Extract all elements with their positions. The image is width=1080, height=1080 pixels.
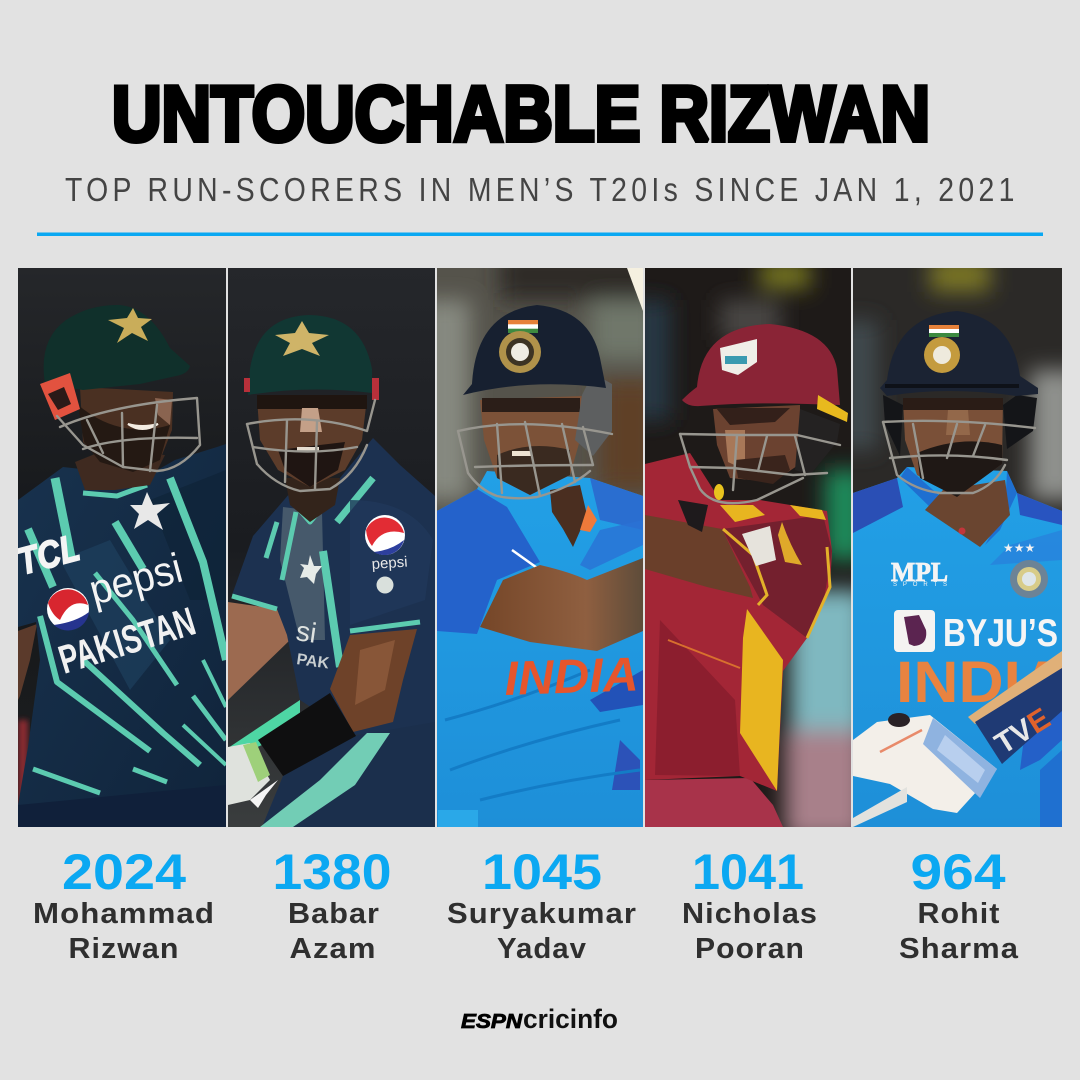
- title: UNTOUCHABLE RIZWAN: [112, 70, 930, 158]
- face: [903, 398, 1003, 497]
- neck: [550, 485, 587, 547]
- flag badge: [929, 325, 959, 337]
- jersey: [437, 471, 643, 827]
- grille: [57, 398, 200, 471]
- batting glove: [228, 742, 278, 808]
- bat: [968, 651, 1062, 764]
- badge: star: [108, 308, 152, 343]
- subtitle: TOP RUN-SCORERS IN MEN’S T20Is SINCE JAN 1, 2021: [65, 171, 1014, 209]
- stat: Suryakumar Yadav: Yadav: [497, 933, 587, 965]
- dark sleeve left: [678, 500, 708, 532]
- jersey text: INDIA: INDIA: [896, 650, 1066, 715]
- badge: star: [275, 321, 329, 356]
- grille: [458, 422, 612, 498]
- arm: [18, 624, 37, 700]
- bat edge: [627, 268, 643, 311]
- grille: [680, 434, 840, 503]
- stat: Mohammad Rizwan: 2024: [62, 844, 186, 900]
- wristband: [258, 693, 356, 776]
- logo: pepsi globe: [365, 515, 405, 555]
- logo: pepsi globe: [47, 588, 89, 630]
- stat: Nicholas Pooran: 1041: [692, 844, 804, 900]
- arm: [645, 515, 753, 598]
- jersey text: PAK partial: PAK: [295, 651, 331, 673]
- sleeve badge: [376, 576, 394, 594]
- jersey star: [300, 555, 322, 584]
- yellow clip: [817, 395, 848, 422]
- sponsor: MPL: MPL: [891, 557, 948, 587]
- neck: [75, 454, 165, 490]
- sleeve wing: [778, 522, 802, 565]
- jersey: [18, 444, 226, 827]
- neck: [925, 480, 1010, 547]
- stat: Nicholas Pooran: Pooran: [695, 933, 805, 965]
- West Indies crest: [720, 339, 757, 375]
- sponsor: BYJU'S: BYJU’S: [943, 612, 1058, 655]
- panel: Suryakumar Yadav photo: [437, 268, 643, 827]
- flag badge: [508, 320, 538, 333]
- helmet: [682, 324, 848, 422]
- neck: [285, 478, 340, 522]
- grille: [247, 400, 375, 491]
- logo: ESPNcricinfo: [461, 1004, 618, 1034]
- sponsor: BYJU'S: [894, 610, 1058, 655]
- jersey: [645, 453, 832, 791]
- stat: Suryakumar Yadav: 1045: [482, 844, 602, 900]
- stat: Mohammad Rizwan: Mohammad: [33, 898, 215, 930]
- stat: Babar Azam: 1380: [272, 844, 392, 900]
- helmet visor side: [575, 373, 612, 456]
- forearm: [330, 629, 417, 732]
- left arm: [228, 602, 290, 700]
- button: [958, 528, 966, 534]
- logo: ESPNcricinfo: cricinfo: [523, 1004, 618, 1034]
- yellow side panel: [740, 609, 783, 791]
- face: [713, 405, 800, 484]
- helmet: [44, 305, 190, 390]
- helmet: [244, 315, 379, 400]
- stat: Mohammad Rizwan: [33, 844, 215, 965]
- stat: Suryakumar Yadav: [447, 844, 637, 965]
- stat: Babar Azam: Azam: [290, 933, 376, 965]
- arm: [480, 558, 643, 651]
- stat: Rohit Sharma: Rohit: [918, 898, 1000, 930]
- jersey text: INDIA: INDIA: [504, 648, 639, 706]
- shorts: [645, 778, 783, 827]
- face: [257, 395, 367, 487]
- BCCI crest: [1010, 560, 1048, 598]
- panel: Babar Azam photo: [228, 268, 435, 827]
- sponsor: TCL: TCL: [13, 527, 84, 584]
- stat: Nicholas Pooran: [682, 844, 818, 965]
- helmet visor side: [795, 409, 840, 475]
- blurred background: [630, 262, 865, 840]
- stat: Babar Azam: [272, 844, 392, 965]
- blurred background: [437, 268, 643, 510]
- helmet: [463, 305, 606, 395]
- face: [480, 396, 582, 495]
- stat: Nicholas Pooran: Nicholas: [682, 898, 818, 930]
- sponsor: pepsi: pepsi: [371, 554, 408, 573]
- BCCI crest: [924, 337, 960, 373]
- stat: Rohit Sharma: [899, 844, 1019, 965]
- jersey text: PAKISTAN: PAKISTAN: [54, 600, 201, 683]
- panel: Mohammad Rizwan photo: [13, 268, 226, 827]
- face: [78, 387, 173, 472]
- bat: TVE: [989, 702, 1056, 761]
- sleeve badge: [742, 526, 776, 566]
- blurred background: [840, 258, 1080, 500]
- helmet clip: [40, 373, 80, 420]
- panel: Rohit Sharma photo: [840, 258, 1080, 827]
- helmet side guards: [883, 395, 1037, 456]
- stat: Suryakumar Yadav: Suryakumar: [447, 898, 637, 930]
- stat: Rohit Sharma: 964: [910, 844, 1006, 900]
- sponsor: pepsi: pepsi: [84, 544, 187, 614]
- green outfield: [230, 700, 300, 747]
- sponsor: SPORTS: SPORTS: [893, 582, 947, 588]
- panel: Nicholas Pooran photo: [630, 262, 865, 840]
- helmet: [880, 311, 1038, 396]
- pants: [260, 722, 435, 827]
- stat: Rohit Sharma: Sharma: [899, 933, 1019, 965]
- batting gloves: [853, 713, 997, 813]
- jersey star: [130, 492, 170, 530]
- jersey: [232, 438, 435, 735]
- stat: Mohammad Rizwan: Rizwan: [68, 933, 180, 965]
- logo: ESPNcricinfo: ESPN: [461, 1011, 523, 1033]
- chin strap clip: [714, 484, 724, 500]
- stat: Babar Azam: Babar: [288, 898, 380, 930]
- sleeve trim: [723, 529, 830, 638]
- stars: ★★★: [1003, 541, 1035, 555]
- bat handle: [853, 787, 907, 827]
- jersey: [853, 467, 1062, 827]
- jersey text: pepsi partial: si: [294, 615, 319, 649]
- grille: [883, 421, 1035, 493]
- BCCI crest: [499, 331, 541, 373]
